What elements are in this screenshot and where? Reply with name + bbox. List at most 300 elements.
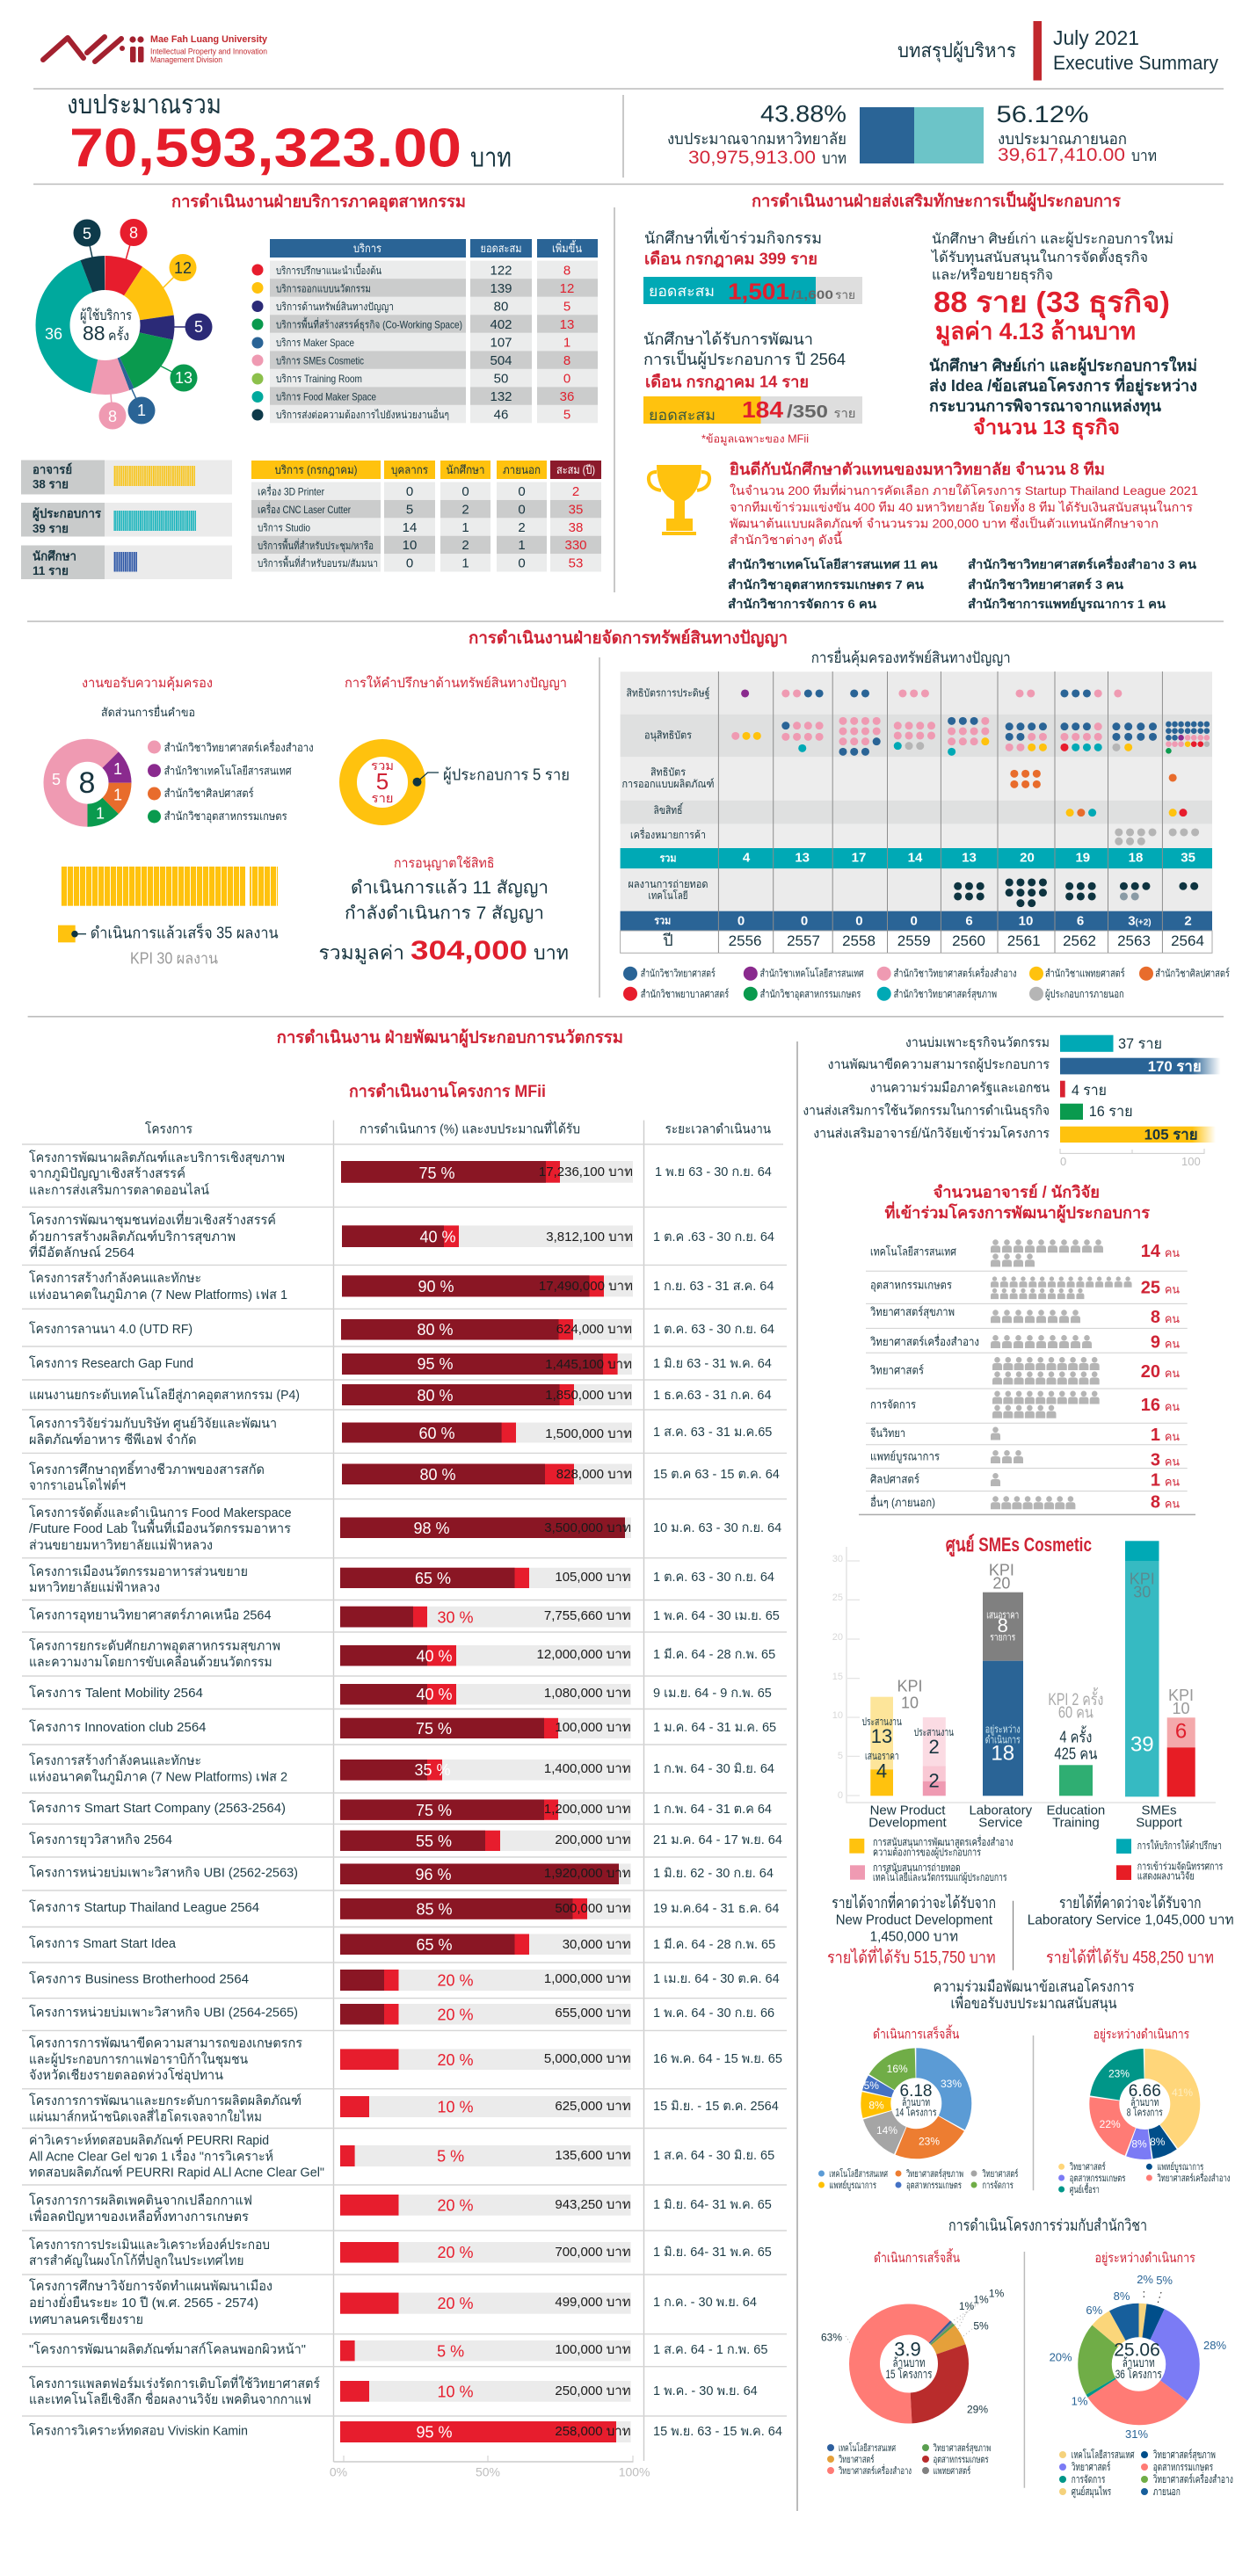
bars: new product development: KPI: [897, 1678, 923, 1695]
donut chart: protection applications: สำนักวิชาอุตสาหกรรมเกษตร: [164, 809, 287, 824]
legend: schools: สำนักวิชาวิทยาศาสตร์เครื่องสำอาง: [894, 966, 1017, 980]
panel: entrepreneurs count: ผู้ประกอบการ: [33, 506, 101, 521]
table: services summary: 0: [563, 371, 570, 387]
project row 31: 258,000 บาท: [555, 2424, 631, 2439]
legend: SMEs Cosmetic: การเข้าร่วมจัดนิทรรศการ: [1137, 1861, 1224, 1873]
project row 19: 500,000 บาท: [555, 1901, 631, 1916]
congratulation text: พัฒนาต้นแบบผลิตภัณฑ์ จำนวนรวม 200,000 บาท ซึ่งเป็นตัวแทนนักศึกษาจาก: [730, 515, 1159, 531]
project row 23: 20 %: [437, 2051, 474, 2069]
students developed as entrepreneurs: /350: [787, 403, 828, 422]
project row 12: โครงการยกระดับศักยภาพอุตสาหกรรมสุขภาพ: [29, 1638, 280, 1654]
table: services summary: ยอดสะสม: [480, 242, 522, 255]
legend: schools: สำนักวิชาเทคโนโลยีสารสนเทศ: [760, 968, 864, 980]
project row 23: [29, 2035, 782, 2084]
bars: SMEs support: 30: [1133, 1583, 1151, 1600]
project row 14: 75 %: [416, 1720, 452, 1738]
bar chart: SMEs Cosmetic: 10: [832, 1710, 843, 1721]
IP filing matrix: การยื่นคุ้มครองทรัพย์สินทางปัญญา: [811, 647, 1011, 667]
table: services summary: 50: [494, 371, 508, 387]
project row 2: 1 ต.ค .63 - 30 ก.ย. 64: [653, 1230, 774, 1244]
table: services summary: 504: [490, 353, 512, 368]
project row 8: 80 %: [419, 1466, 456, 1484]
bar chart: entrepreneurs by activity: 4 ราย: [1072, 1082, 1107, 1099]
revenue: laboratory service: รายได้ที่ได้รับ 458,250 บาท: [1046, 1945, 1214, 1967]
legend: SMEs Cosmetic: แสดงผลงานวิจัย: [1137, 1870, 1195, 1883]
header: logo: [43, 34, 268, 65]
budget split: university: [667, 100, 846, 168]
donut chart: ongoing school projects: 20%: [1050, 2350, 1072, 2364]
pictogram table: lecturers by school: [859, 1239, 1195, 1514]
percent axis: [330, 2456, 650, 2479]
project row 11: [29, 1607, 780, 1628]
budget split: university: บาท: [822, 149, 846, 167]
donut chart: completed school projects: ล้านบาท: [893, 2355, 925, 2369]
table: services summary: บริการ: [353, 242, 381, 255]
licensing text: [318, 855, 569, 966]
donut chart: protection applications: 1: [113, 787, 122, 804]
project row 2: [29, 1210, 774, 1260]
table: July facility services: 1: [461, 555, 469, 571]
project row 29: 1 ส.ค. 64 - 1 ก.พ. 65: [653, 2343, 767, 2357]
project row 15: แห่งอนาคตในภูมิภาค (7 New Platforms) เฟส 2: [29, 1768, 287, 1784]
project row 24: 625,000 บาท: [555, 2099, 631, 2114]
project row 10: โครงการเมืองนวัตกรรมอาหารส่วนขยาย: [29, 1564, 248, 1579]
IP filing matrix: 18: [1129, 851, 1143, 866]
donut chart: protection applications: งานขอรับความคุ้มครอง: [82, 676, 213, 692]
donut chart: completed school projects: 29%: [967, 2403, 988, 2415]
project row 8: 828,000 บาท: [556, 1467, 632, 1482]
project row 27: สารสำคัญในผงโกโก้ที่ปลูกในประเทศไทย: [29, 2251, 244, 2268]
congratulation text: [728, 461, 1198, 612]
donut chart: ongoing proposals: 22%: [1100, 2118, 1121, 2130]
header: report title: [897, 21, 1218, 81]
project row 21: 1,000,000 บาท: [544, 1971, 631, 1986]
legend: schools: [623, 966, 1230, 1001]
project row 21: โครงการ Business Brotherhood 2564: [29, 1970, 249, 1986]
IP filing matrix: สิทธิบัตร: [650, 766, 686, 779]
project row 23: โครงการการพัฒนาขีดความสามารถของเกษตรกร: [29, 2035, 302, 2051]
project row 16: 1 ก.พ. 64 - 31 ต.ค 64: [653, 1803, 772, 1817]
IP filing matrix: 2: [1184, 914, 1192, 928]
bar chart: entrepreneurs by activity: 0: [1060, 1155, 1066, 1168]
pictogram table: lecturers by school: คน: [1165, 1246, 1180, 1259]
donut chart: ongoing proposals: อุตสาหกรรมเกษตร: [1070, 2173, 1125, 2184]
panel: lecturers count: อาจารย์: [33, 462, 72, 476]
project row 1: และการส่งเสริมการตลาดออนไลน์: [29, 1182, 209, 1198]
pictogram table: lecturers by school: แพทย์บูรณาการ: [870, 1449, 940, 1463]
IP filing matrix: 6: [1077, 914, 1084, 928]
donut chart: completed proposals: 23%: [919, 2136, 940, 2148]
legend: SMEs Cosmetic: [849, 1834, 1224, 1884]
IP filing matrix: 0: [801, 914, 808, 928]
students joining activities: ยอดสะสม: [649, 283, 715, 300]
legend: SMEs Cosmetic: เทคโนโลยีและนวัตกรรมแก่ผู้ประกอบการ: [873, 1871, 1007, 1884]
bars: new product development: 10: [901, 1694, 919, 1711]
funded businesses: ได้รับทุนสนับสนุนในการจัดตั้งธุรกิจ: [930, 247, 1148, 266]
IP filing matrix: รวม: [659, 853, 677, 865]
donut chart: protection applications: 5: [52, 771, 61, 788]
revenue: laboratory service: รายได้ที่คาดว่าจะได้รับจาก: [1059, 1891, 1201, 1912]
pictogram table: lecturers by school: คน: [1165, 1497, 1180, 1510]
donut chart: completed school projects: 3.9: [894, 2339, 921, 2361]
project row 16: 75 %: [416, 1802, 452, 1819]
congratulation text: สำนักวิชาวิทยาศาสตร์เครื่องสำอาง 3 คน: [968, 555, 1196, 571]
budget split bar: [860, 107, 984, 163]
project row 2: โครงการพัฒนาชุมชนท่องเที่ยวเชิงสร้างสรรค์: [29, 1210, 276, 1229]
project row 13: โครงการ Talent Mobility 2564: [29, 1685, 203, 1701]
project row 4: [29, 1319, 774, 1339]
project row 25: All Acne Clear Gel ขวด 1 เรื่อง "การวิเคราะห์: [29, 2147, 273, 2165]
budget split: external: 39,617,410.00: [998, 145, 1125, 165]
header: logo: Intellectual Property and Innovation: [150, 47, 267, 56]
table: July facility services: 1: [518, 538, 526, 553]
project row 14: [29, 1718, 776, 1738]
licensing text: ดำเนินการแล้ว 11 สัญญา: [351, 879, 549, 898]
table: services summary: บริการออกแบบนวัตกรรม: [276, 282, 371, 294]
project row 16: [29, 1800, 772, 1820]
project row 24: [29, 2093, 779, 2125]
revenue: laboratory service: [1028, 1891, 1234, 1967]
legend: schools: สำนักวิชาวิทยาศาสตร์: [641, 968, 716, 980]
project row 8: จากราเอนโดไฟต์ฯ: [29, 1477, 126, 1493]
project row 9: [29, 1503, 781, 1553]
bar chart: entrepreneurs by activity: งานส่งเสริมการใช้นวัตกรรมในการดำเนินธุรกิจ: [803, 1103, 1050, 1120]
table: services summary: 36: [560, 389, 574, 404]
donut chart: completed school projects: 1%: [973, 2294, 989, 2306]
bars: SMEs support: 39: [1130, 1733, 1154, 1757]
budget split: external: งบประมาณภายนอก: [998, 130, 1127, 148]
project row 5: 1,445,100 บาท: [545, 1357, 632, 1372]
congratulation text: จากทีมเข้าร่วมแข่งขัน 400 ทีม 40 มหาวิทยาลัย โดยทั้ง 8 ทีม ได้รับเงินสนับสนุนในการ: [730, 498, 1193, 515]
revenue: new product development: 1,450,000 บาท: [870, 1929, 958, 1944]
donut chart: ongoing school projects: 2%: [1137, 2273, 1153, 2286]
table: July facility services: 2: [461, 503, 469, 517]
donut chart: completed school projects: 1%: [989, 2287, 1005, 2299]
budget split: external: 56.12%: [997, 101, 1088, 127]
bar chart: entrepreneurs by activity: 37 ราย: [1118, 1035, 1162, 1052]
bar: education training: 60 คน: [1058, 1703, 1094, 1721]
project row 25: 1 ส.ค. 64 - 30 มิ.ย. 65: [653, 2149, 774, 2163]
header: logo: Mae Fah Luang University: [150, 34, 268, 45]
project row 19: 85 %: [416, 1900, 453, 1918]
project row 19: โครงการ Startup Thailand League 2564: [29, 1899, 259, 1915]
donut chart: protection applications: สำนักวิชาวิทยาศาสตร์เครื่องสำอาง: [164, 740, 314, 754]
pictogram table: lecturers by school: คน: [1165, 1338, 1180, 1351]
congratulation text: สำนักวิชาการจัดการ 6 คน: [728, 597, 876, 611]
project row 11: 1 พ.ค. 64 - 30 เม.ย. 65: [653, 1609, 780, 1623]
congratulation text: ยินดีกับนักศึกษาตัวแทนของมหาวิทยาลัย จำนวน 8 ทีม: [730, 461, 1105, 478]
total budget: 70,593,323.00: [69, 118, 461, 179]
bar: laboratory service: [983, 1561, 1023, 1796]
heading: MFii projects: การดำเนินงานโครงการ MFii: [349, 1081, 546, 1101]
table: services summary: 5: [563, 408, 570, 422]
IP filing matrix: 2556: [729, 932, 762, 949]
project row 24: แผ่นมาส์กหน้าชนิดเจลสี่ไฮโดรเจลจากใยไหม: [29, 2108, 262, 2125]
revenue: laboratory service: Laboratory Service 1,045,000 บาท: [1028, 1912, 1234, 1927]
header: report title: July 2021: [1053, 26, 1139, 49]
table: services summary: 107: [490, 336, 512, 350]
donut chart: ongoing proposals: 8 โครงการ: [1127, 2106, 1163, 2118]
donut chart: service users: 5: [194, 318, 203, 336]
donut chart: service users: 8: [108, 408, 117, 425]
pictogram table: lecturers by school: คน: [1165, 1400, 1180, 1413]
donut chart: completed school projects: อุตสาหกรรมเกษตร: [934, 2455, 989, 2465]
table: July facility services: บริการ Studio: [258, 521, 310, 533]
pictogram table: lecturers by school: 25: [1141, 1279, 1160, 1298]
table: July facility services: 2: [518, 520, 526, 535]
table: July facility services: บริการพื้นที่สำหรับอบรม/สัมมนา: [258, 555, 378, 570]
project row 17: โครงการยุววิสาหกิจ 2564: [29, 1832, 172, 1848]
category labels: Training: [1052, 1815, 1100, 1830]
IP filing matrix: 0: [737, 914, 745, 928]
pictogram table: lecturers by school: 1: [1151, 1426, 1160, 1445]
table: July facility services: นักศึกษา: [447, 463, 485, 476]
project row 14: โครงการ Innovation club 2564: [29, 1719, 206, 1735]
pictogram table: lecturers by school: วิทยาศาสตร์สุขภาพ: [869, 1305, 955, 1319]
donut chart: completed proposals: แพทย์บูรณาการ: [829, 2180, 876, 2191]
table: services summary: 139: [490, 281, 512, 296]
donut chart: completed proposals: ดำเนินการเสร็จสิ้น: [873, 2024, 959, 2042]
project row 5: โครงการ Research Gap Fund: [29, 1355, 193, 1371]
donut chart: ongoing school projects: 36 โครงการ: [1115, 2367, 1162, 2381]
table: July facility services: 0: [518, 503, 526, 517]
project row 25: ทดสอบผลิตภัณฑ์ PEURRI Rapid ALl Acne Clear Gel": [29, 2166, 324, 2181]
project row 24: 10 %: [437, 2099, 474, 2116]
project row 3: [29, 1270, 774, 1303]
IP filing matrix: การออกแบบผลิตภัณฑ์: [622, 778, 714, 790]
table: July facility services: 5: [406, 503, 413, 517]
project row 29: [29, 2340, 767, 2361]
category labels: Service: [978, 1815, 1022, 1830]
IP filing matrix: สิทธิบัตรการประดิษฐ์: [626, 687, 710, 700]
bar: laboratory service: KPI: [989, 1561, 1014, 1578]
bar chart: SMEs Cosmetic: 30: [832, 1554, 843, 1564]
bar chart: entrepreneurs by activity: งานส่งเสริมอาจารย์/นักวิจัยเข้าร่วมโครงการ: [813, 1126, 1050, 1142]
bar chart: entrepreneurs by activity: 16 ราย: [1089, 1103, 1133, 1120]
congratulation text: สำนักวิชาเทคโนโลยีสารสนเทศ 11 คน: [728, 556, 938, 571]
donut chart: completed proposals: เทคโนโลยีสารสนเทศ: [829, 2167, 888, 2180]
project row 22: [29, 2004, 774, 2025]
pictogram table: lecturers by school: คน: [1165, 1430, 1180, 1443]
project row 2: ด้วยการสร้างผลิตภัณฑ์บริการสุขภาพ: [29, 1230, 236, 1245]
donut chart: completed school projects: 5%: [973, 2320, 989, 2333]
project row 20: [29, 1934, 775, 1955]
icon: trophy: [649, 465, 709, 535]
project row 11: 7,755,660 บาท: [544, 1608, 631, 1623]
donut chart: ongoing school projects: วิทยาศาสตร์: [1072, 2461, 1111, 2473]
table: services summary: เพิ่มขึ้น: [552, 240, 582, 255]
IP filing matrix: เทคโนโลยี: [649, 889, 687, 902]
project row 2: 40 %: [419, 1229, 456, 1246]
table: services summary: 13: [560, 317, 574, 332]
project row 28: อย่างยั่งยืนระยะ 10 ปี (พ.ศ. 2565 - 2574): [29, 2293, 258, 2311]
project row 7: [29, 1415, 772, 1448]
project row 29: 5 %: [437, 2343, 464, 2361]
project row 28: เทศบาลนครเชียงราย: [29, 2312, 143, 2327]
donut chart: completed proposals: 33%: [941, 2078, 962, 2090]
donut chart: ongoing proposals: 8%: [1131, 2137, 1147, 2150]
project row 27: 20 %: [437, 2244, 474, 2261]
table: July facility services: 330: [564, 538, 587, 553]
pictogram table: lecturers by school: 3: [1151, 1450, 1160, 1469]
IP filing matrix: 2557: [787, 932, 820, 949]
heading: innovation entrepreneurs: การดำเนินงาน ฝ่ายพัฒนาผู้ประกอบการนวัตกรรม: [277, 1027, 623, 1048]
project row 23: 5,000,000 บาท: [544, 2051, 631, 2066]
pictogram table: lecturers by school: 8: [1151, 1492, 1160, 1512]
project row 1: 75 %: [418, 1165, 455, 1182]
pictogram table: lecturers by school: 14: [1141, 1242, 1161, 1261]
IP filing matrix: 13: [795, 851, 810, 866]
funded businesses: [930, 230, 1173, 346]
project row 12: [29, 1638, 775, 1670]
donut chart: service users: 12: [174, 259, 192, 277]
funded businesses: มูลค่า 4.13 ล้านบาท: [935, 318, 1136, 346]
heading: lecturers in entrepreneur projects: จำนวนอาจารย์ / นักวิจัย: [934, 1183, 1100, 1201]
table: July facility services: 0: [518, 484, 526, 499]
heading: industrial services: การดำเนินงานฝ่ายบริการภาคอุตสาหกรรม: [171, 193, 466, 213]
heading: SMEs Cosmetic: ศูนย์ SMEs Cosmetic: [946, 1534, 1092, 1557]
donut chart: protection applications: สำนักวิชาเทคโนโลยีสารสนเทศ: [164, 765, 292, 778]
bar chart: SMEs Cosmetic: [832, 1541, 1216, 1830]
project row 18: โครงการหน่วยบ่มเพาะวิสาหกิจ UBI (2562-2563): [29, 1865, 298, 1881]
bar chart: entrepreneurs by activity: งานความร่วมมือภาครัฐและเอกชน: [870, 1081, 1050, 1096]
donut chart: ongoing school projects: การจัดการ: [1072, 2473, 1106, 2485]
IP consultation ring: ผู้ประกอบการ 5 ราย: [443, 766, 570, 785]
project row 29: 100,000 บาท: [555, 2342, 631, 2357]
bar chart: SMEs Cosmetic: 5: [838, 1751, 843, 1761]
bar chart: entrepreneurs by activity: 105 ราย: [1144, 1126, 1198, 1143]
donut chart: protection applications: 1: [96, 805, 105, 823]
donut chart: ongoing school projects: 6%: [1086, 2304, 1103, 2317]
project row 28: [29, 2278, 757, 2327]
funded businesses: 88 ราย (33 ธุรกิจ): [934, 286, 1170, 321]
project row 10: 105,000 บาท: [555, 1570, 631, 1585]
donut chart: ongoing proposals: 41%: [1172, 2086, 1193, 2099]
donut chart: protection applications: สัดส่วนการยื่นคำขอ: [101, 705, 195, 719]
project row 15: 1 ก.พ. 64 - 30 มิ.ย. 64: [653, 1762, 774, 1776]
panel: entrepreneurs count: [21, 503, 232, 536]
stripes: completed IP works: ดำเนินการแล้วเสร็จ 35 ผลงาน: [91, 923, 279, 942]
IP filing matrix: 2561: [1007, 932, 1041, 949]
table: services summary: บริการปรึกษาแนะนำเบื้องต้น: [276, 263, 381, 277]
IP filing matrix: 0: [911, 914, 918, 928]
bar: education training: KPI 2 ครั้ง: [1048, 1687, 1103, 1709]
project row 26: 943,250 บาท: [555, 2197, 631, 2212]
table: services summary: บริการ Maker Space: [276, 337, 354, 349]
funded businesses: นักศึกษา ศิษย์เก่า และผู้ประกอบการใหม่: [932, 230, 1173, 248]
project row 3: 90 %: [418, 1278, 454, 1295]
pictogram table: lecturers by school: 9: [1151, 1333, 1160, 1353]
project row 31: 95 %: [416, 2424, 453, 2442]
pictogram table: lecturers by school: เทคโนโลยีสารสนเทศ: [870, 1244, 957, 1258]
project row 15: 1,400,000 บาท: [544, 1761, 631, 1776]
donut chart: completed proposals: การจัดการ: [982, 2181, 1014, 2191]
heading: proposal collaboration: เพื่อขอรับงบประมาณสนับสนุน: [951, 1992, 1117, 2013]
project row 12: 1 มี.ค. 64 - 28 ก.พ. 65: [653, 1647, 775, 1662]
budget split: university: 43.88%: [760, 100, 846, 127]
donut chart: completed school projects: 63%: [821, 2331, 842, 2343]
donut chart: completed proposals: วิทยาศาสตร์สุขภาพ: [905, 2168, 963, 2180]
pictogram table: lecturers by school: วิทยาศาสตร์: [869, 1363, 924, 1376]
project row 6: 1 ธ.ค.63 - 31 ก.ค. 64: [653, 1389, 772, 1403]
donut chart: ongoing proposals: แพทย์บูรณาการ: [1157, 2161, 1203, 2173]
project row 21: 1 เม.ย. 64 - 30 ต.ค. 64: [653, 1972, 780, 1986]
table: services summary: [251, 239, 598, 423]
congratulation text: ในจำนวน 200 ทีมที่ผ่านการคัดเลือก ภายใต้โครงการ Startup Thailand League 2021: [730, 483, 1198, 497]
donut chart: ongoing proposals: 6.66: [1129, 2082, 1161, 2101]
congratulation text: สำนักวิชาวิทยาศาสตร์ 3 คน: [968, 577, 1123, 591]
project row 18: 96 %: [415, 1866, 452, 1883]
pictogram table: lecturers by school: อื่นๆ (ภายนอก): [870, 1495, 935, 1509]
bar: laboratory service: 20: [992, 1574, 1010, 1592]
project row 13: 40 %: [416, 1686, 453, 1703]
revenue: new product development: New Product Development: [836, 1912, 993, 1927]
project row 21: 20 %: [437, 1972, 474, 1990]
project row 15: โครงการสร้างกำลังคนและทักษะ: [29, 1752, 201, 1768]
project row 20: 30,000 บาท: [563, 1937, 631, 1952]
pictogram table: lecturers by school: ศิลปศาสตร์: [870, 1472, 919, 1485]
bars: new product development: 2: [928, 1769, 940, 1791]
funded businesses: และ/หรือขยายธุรกิจ: [932, 267, 1053, 284]
pictogram table: lecturers by school: คน: [1165, 1312, 1180, 1325]
IP filing matrix: 19: [1075, 851, 1090, 866]
project row 28: 499,000 บาท: [555, 2295, 631, 2310]
project row 28: โครงการศึกษาวิจัยการจัดทำแผนพัฒนาเมือง: [29, 2278, 272, 2294]
project row 30: 10 %: [437, 2384, 474, 2401]
ideas under review: ส่ง Idea /ข้อเสนอโครงการ ที่อยู่ระหว่าง: [929, 374, 1197, 396]
project row 27: [29, 2237, 772, 2268]
donut chart: ongoing school projects: 28%: [1203, 2339, 1226, 2352]
donut chart: protection applications: [52, 676, 314, 824]
project row 3: แห่งอนาคตในภูมิภาค (7 New Platforms) เฟส 1: [29, 1287, 287, 1303]
project row 27: โครงการการประเมินและวิเคราะห์องค์ประกอบ: [29, 2237, 270, 2253]
donut chart: ongoing proposals: อยู่ระหว่างดำเนินการ: [1094, 2027, 1189, 2042]
donut chart: ongoing school projects: ล้านบาท: [1123, 2355, 1155, 2369]
project row 12: 40 %: [416, 1647, 453, 1665]
bar: laboratory service: อยู่ระหว่าง: [985, 1723, 1021, 1737]
table: July facility services: 35: [569, 503, 583, 517]
table: July facility services: 14: [403, 520, 417, 535]
table: services summary: 5: [563, 299, 570, 315]
project row 7: 60 %: [418, 1425, 455, 1442]
bar chart: entrepreneurs by activity: [803, 1035, 1220, 1168]
project row 12: และความงามโดยการขับเคลื่อนด้วยนวัตกรรม: [29, 1652, 272, 1670]
project row 11: โครงการอุทยานวิทยาศาสตร์ภาคเหนือ 2564: [29, 1607, 271, 1624]
pictogram table: lecturers by school: จีนวิทยา: [870, 1426, 905, 1440]
stripes: completed IP works: KPI 30 ผลงาน: [130, 950, 218, 968]
IP filing matrix: 2559: [897, 932, 931, 949]
project row 26: 1 มิ.ย. 64- 31 พ.ค. 65: [653, 2198, 772, 2212]
project row 25: [29, 2133, 774, 2181]
table: services summary: 122: [490, 264, 512, 278]
table: July facility services: บริการพื้นที่สำหรับประชุม/หารือ: [258, 538, 374, 553]
donut chart: completed proposals: 8%: [868, 2099, 884, 2111]
project row 9: /Future Food Lab ในพื้นที่เมืองนวัตกรรมอาหาร: [29, 1519, 291, 1536]
donut chart: service users: 5: [83, 225, 91, 243]
IP filing matrix: 0: [855, 914, 863, 928]
donut chart: completed proposals: [818, 2024, 1018, 2191]
table: services summary: 8: [563, 353, 570, 368]
table: services summary: 46: [494, 408, 508, 422]
students developed as entrepreneurs: *ข้อมูลเฉพาะของ MFii: [701, 433, 809, 446]
project row 6: 1,850,000 บาท: [545, 1388, 632, 1403]
heading: lecturers in entrepreneur projects: [884, 1183, 1150, 1223]
project row 25: 135,600 บาท: [555, 2148, 631, 2163]
IP filing matrix: 4: [743, 851, 751, 866]
donut chart: service users: 8: [129, 224, 138, 242]
congratulation text: สำนักวิชาการแพทย์บูรณาการ 1 คน: [968, 597, 1166, 612]
project row 26: [29, 2193, 772, 2224]
